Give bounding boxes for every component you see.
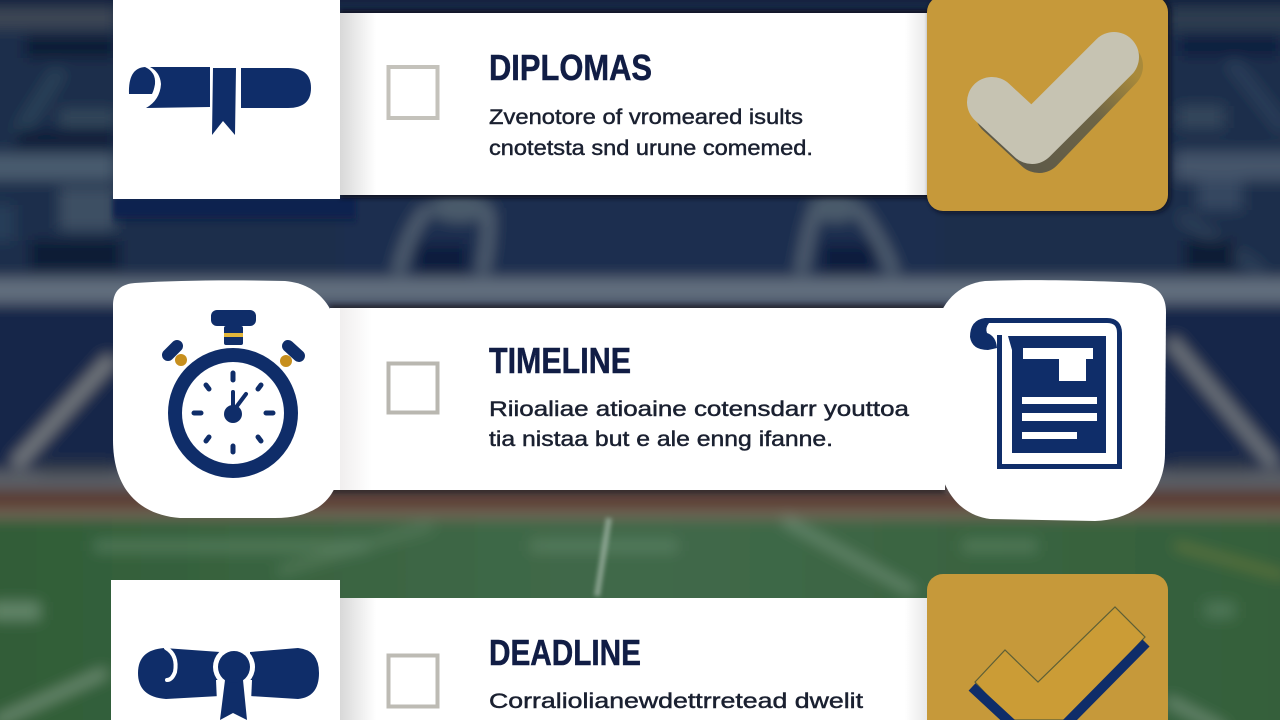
row 1: diplomas xyxy=(113,0,1171,225)
icon tile xyxy=(113,280,340,518)
description: Riioaliae atioaine cotensdarr youttoa xyxy=(489,398,909,421)
gold check tile xyxy=(927,0,1168,211)
text panel xyxy=(330,308,945,490)
description: cnotetsta snd urune comemed. xyxy=(489,137,813,160)
icon: outlined check mark xyxy=(972,607,1146,720)
gold tile shadow xyxy=(929,0,1171,213)
description: Zvenotore of vromeared isults xyxy=(489,106,803,129)
icon tile right xyxy=(935,280,1166,521)
icon: sealed diploma xyxy=(138,646,319,720)
description: tia nistaa but e ale enng ifanne. xyxy=(489,428,833,451)
checkbox xyxy=(388,67,438,118)
checkbox xyxy=(388,656,438,706)
icon: stopwatch xyxy=(168,310,299,471)
description: Corraliolianewdettrretead dwelit xyxy=(489,690,863,713)
text panel xyxy=(338,13,928,195)
text panel xyxy=(338,598,928,720)
description xyxy=(489,106,813,160)
row 2: timeline xyxy=(113,280,1166,521)
icon: diploma scroll xyxy=(129,67,311,135)
panel shadow xyxy=(330,305,945,494)
tile shadow xyxy=(113,197,356,225)
checkbox xyxy=(388,364,438,412)
icon tile xyxy=(113,0,340,199)
icon tile xyxy=(111,580,340,720)
row 3: deadline xyxy=(111,574,1168,720)
heading: DIPLOMAS xyxy=(489,47,652,88)
panel shadow xyxy=(340,10,930,198)
description xyxy=(489,398,909,451)
icon: 3d check mark xyxy=(992,57,1118,148)
heading: TIMELINE xyxy=(489,340,631,381)
heading: DEADLINE xyxy=(489,632,641,673)
icon: document scroll xyxy=(970,318,1120,466)
gold check tile xyxy=(927,574,1168,720)
